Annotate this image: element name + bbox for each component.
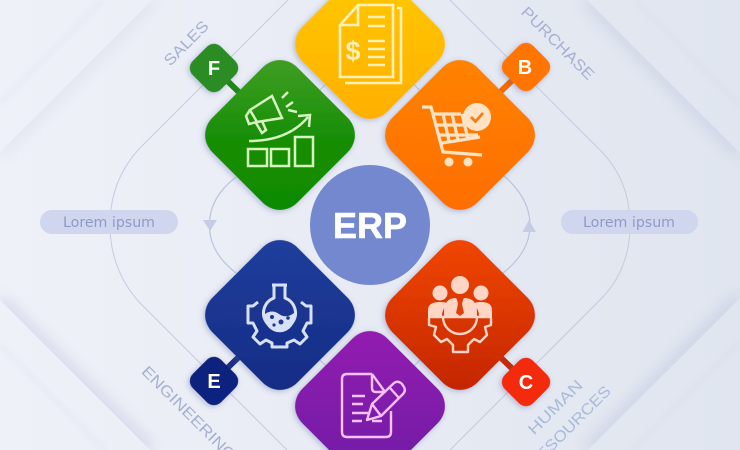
badge: F <box>186 40 242 96</box>
icon: megaphone and growth bars <box>246 92 313 166</box>
badge: C <box>498 354 554 410</box>
label: purchase: PURCHASE <box>517 4 597 84</box>
ERP hub circle: ERP <box>333 205 407 246</box>
left pill label <box>40 210 178 234</box>
label: engineering: ENGINEERING <box>138 363 239 450</box>
badge: C: C <box>519 372 533 394</box>
ERP hub circle <box>310 165 430 285</box>
panel: engineering blue <box>186 230 365 409</box>
icon: invoice document: $ <box>345 36 361 66</box>
badge: E: E <box>207 371 221 393</box>
icon: document and pencil <box>342 374 405 437</box>
right pill label: Lorem ipsum <box>583 215 675 231</box>
label: sales: SALES <box>161 18 213 70</box>
badge: B <box>498 39 554 95</box>
right pill label <box>561 210 698 234</box>
arrow: right flow <box>503 175 536 273</box>
panel: human resources red <box>375 230 554 410</box>
connector: E <box>214 351 245 381</box>
arrow: left flow <box>203 177 236 273</box>
panel: finance yellow <box>285 0 455 129</box>
badge: F: F <box>208 58 220 80</box>
badge: E <box>186 353 242 409</box>
icon: flask and gear <box>248 285 311 347</box>
icon: shopping cart with check <box>422 103 491 166</box>
label: human resources: HUMAN <box>525 377 586 438</box>
connector: C <box>495 352 526 382</box>
icon: people and gear <box>428 276 492 352</box>
connector: B <box>495 67 526 97</box>
panel: purchase orange <box>375 39 554 220</box>
panel: sales green <box>186 40 365 220</box>
badge: B: B <box>518 57 532 79</box>
connection curves <box>110 0 630 450</box>
icon: invoice document <box>340 5 401 83</box>
left pill label: Lorem ipsum <box>63 215 155 231</box>
connector: F <box>214 68 245 98</box>
panel: documentation purple <box>285 321 455 450</box>
